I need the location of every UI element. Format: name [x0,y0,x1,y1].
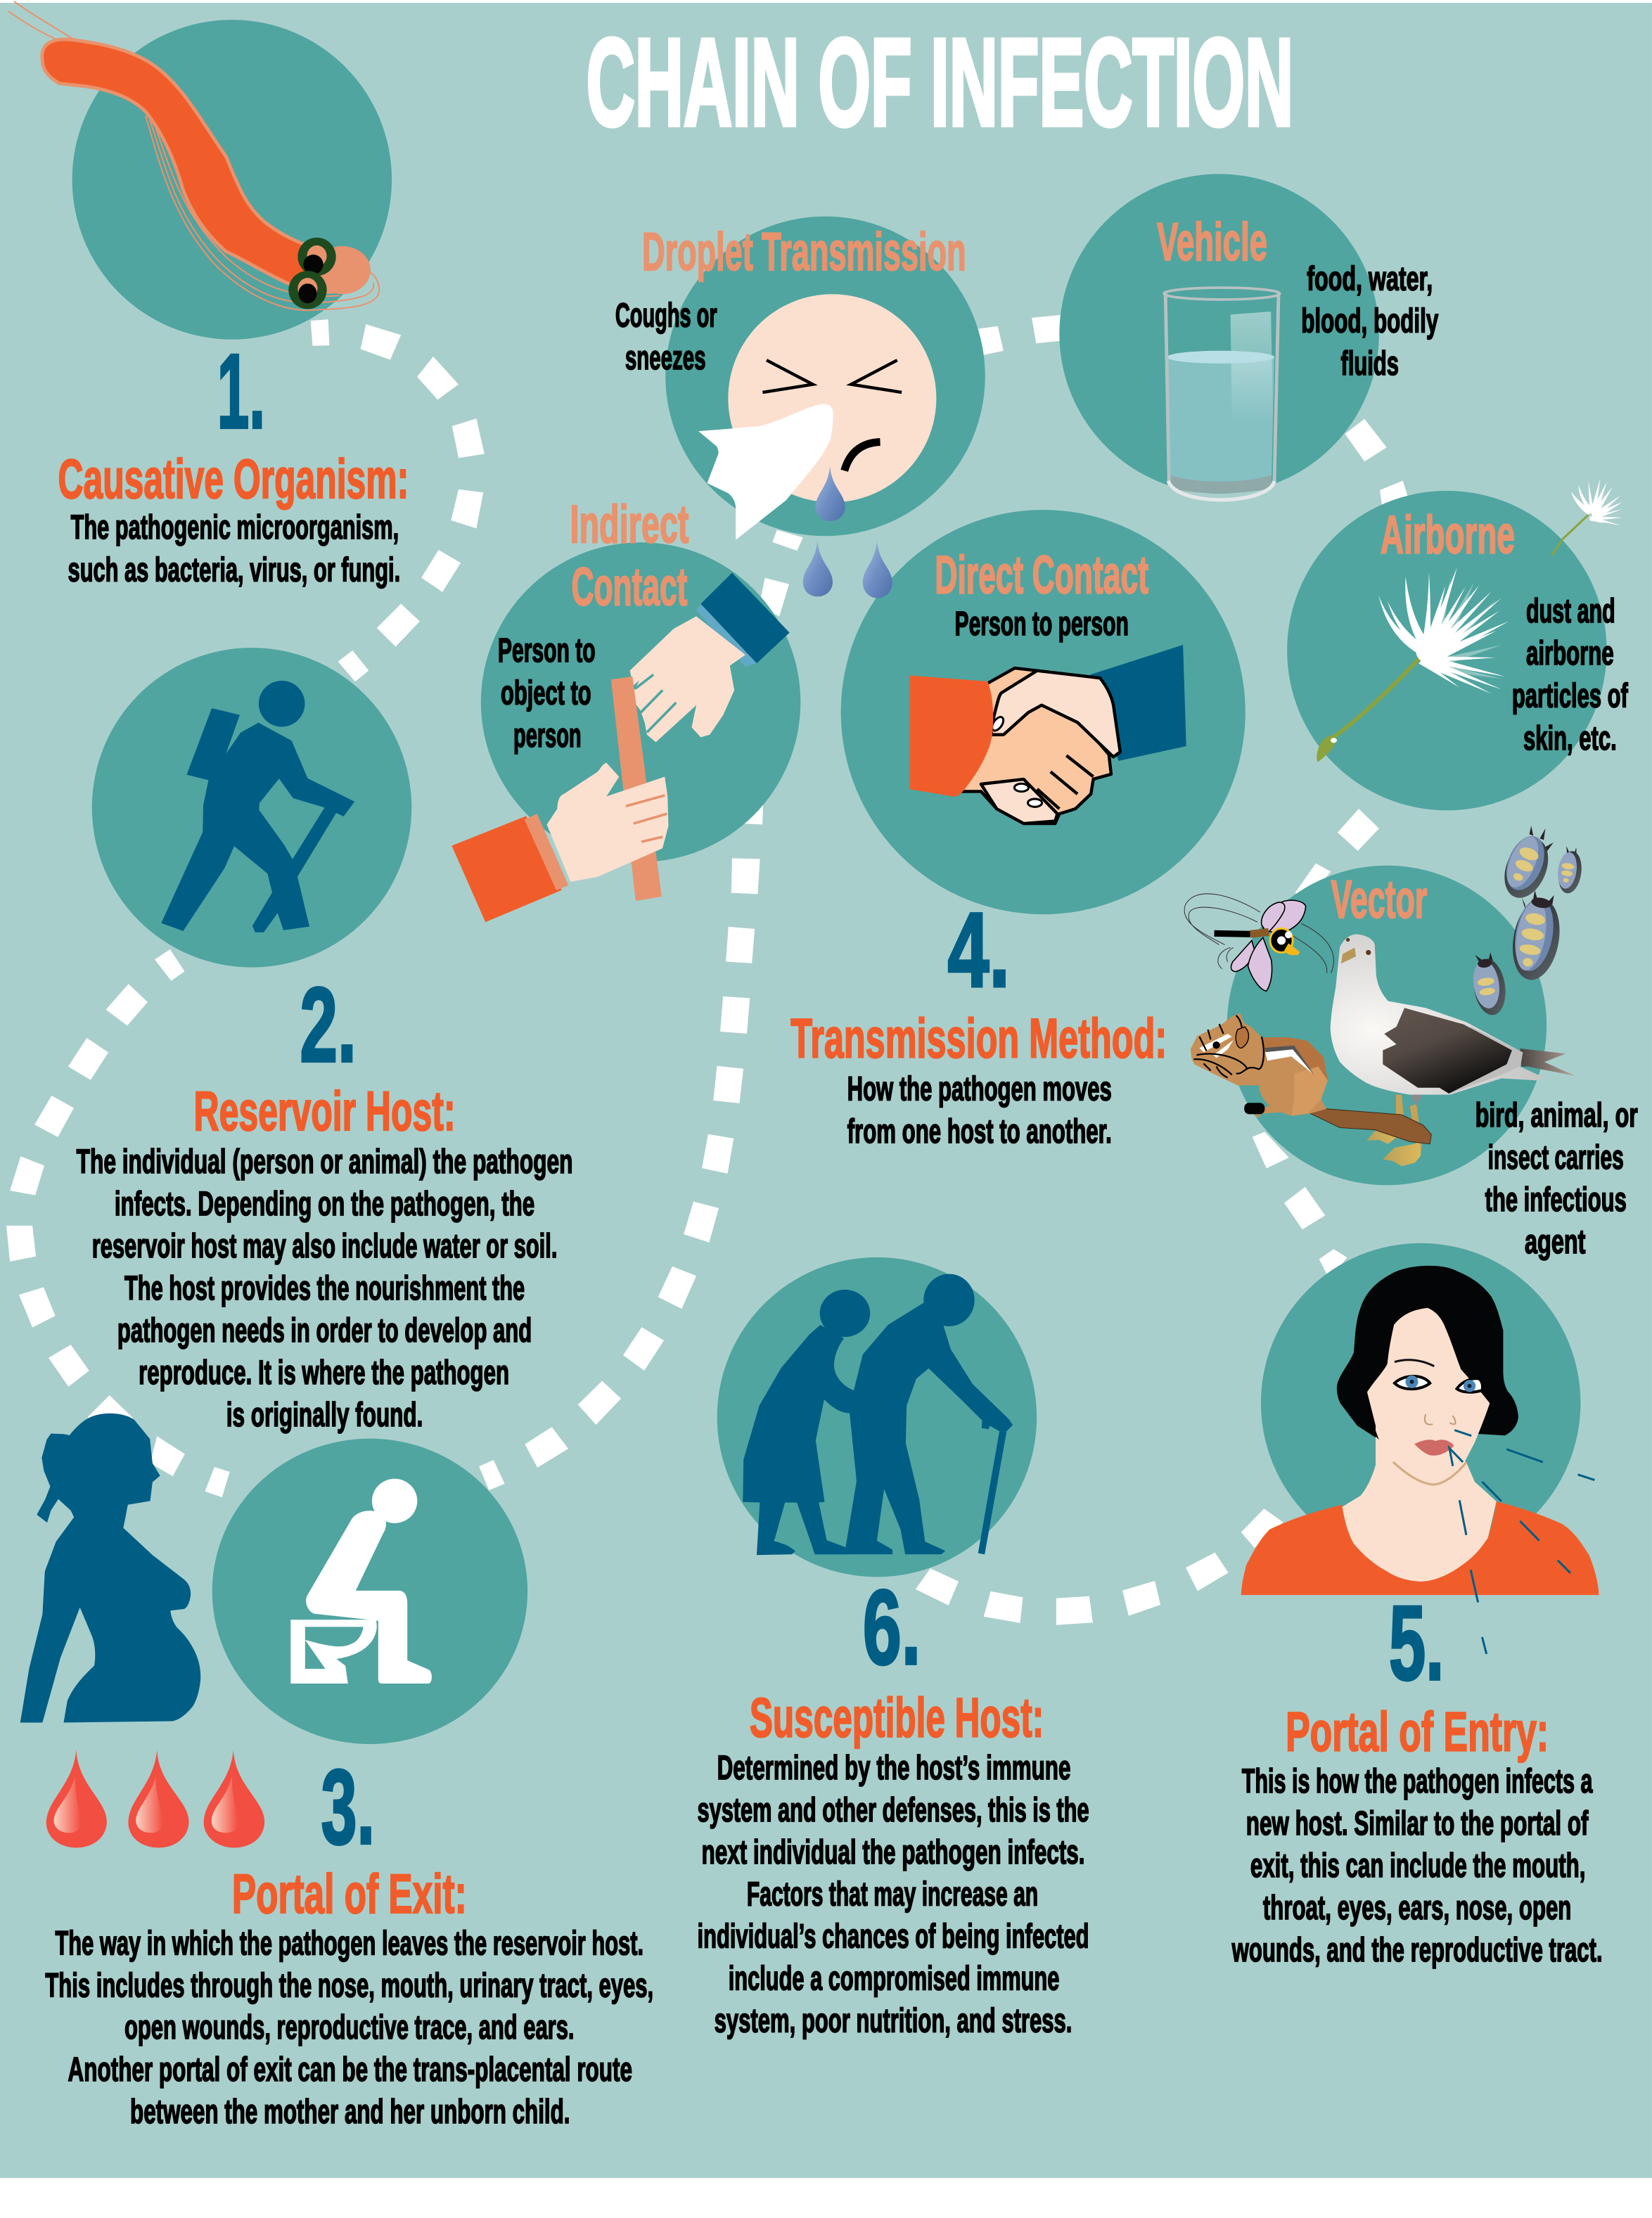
text: susceptible host description: include a compromised immune [729,1960,1059,1998]
text: portal of exit description: open wounds, reproductive trace, and ears. [124,2008,575,2046]
icon: woman portrait [1241,1266,1599,1595]
dashed chain path [6,314,1410,1625]
text: vector examples [1475,1096,1638,1261]
text: person to object to person: Person to [498,632,596,669]
text: vehicle examples: food, water, [1307,259,1433,297]
text: vehicle examples: blood, bodily [1301,302,1438,340]
icon: small dandelion seed [1552,479,1622,556]
heading: vector: Vector [1331,870,1427,930]
number 6: 6. [863,1568,921,1686]
heading: reservoir host: Reservoir Host: [194,1080,456,1142]
text: reservoir host description: reservoir host may also include water or soil. [92,1227,557,1265]
heading: vehicle: Vehicle [1157,212,1267,272]
icon: elderly couple [743,1274,1013,1555]
text: person to object to person [498,632,596,755]
text: vehicle examples [1301,259,1438,383]
icon: seagull [1331,934,1575,1166]
text: portal of exit description: Another portal of exit can be the trans-placental route [68,2051,632,2089]
text: person to object to person: person [513,717,582,755]
text: portal of exit description: between the mother and her unborn child. [130,2093,570,2131]
text: reservoir host description [77,1143,573,1434]
icon: pregnant woman [20,1414,200,1723]
text: causative organism description: The pathogenic microorganism, [71,508,399,546]
text: susceptible host description: system and other defenses, this is the [697,1791,1089,1829]
text: portal of exit description: The way in which the pathogen leaves the reservoir host. [55,1924,643,1962]
text: coughs or sneezes: sneezes [625,339,706,377]
heading: indirect contact: Contact [572,558,687,617]
number 4: 4. [947,890,1010,1009]
heading: portal of exit: Portal of Exit: [232,1863,467,1925]
number 5: 5. [1389,1583,1444,1702]
heading: direct contact: Direct Contact [935,546,1148,605]
text: reservoir host description: The host provides the nourishment the [124,1269,525,1307]
icon: sneezing face [698,294,936,540]
text: coughs or sneezes [615,297,717,377]
text: transmission method description: How the pathogen moves [847,1070,1112,1108]
heading: airborne: Airborne [1381,505,1515,565]
icon: large dandelion seed [1317,567,1509,762]
icon: glass of water [1164,288,1280,500]
icon: person on toilet [290,1479,432,1684]
text: reservoir host description: The individual (person or animal) the pathogen [77,1143,573,1181]
text: transmission method description: from one host to another. [847,1113,1112,1150]
icon: water droplets [803,466,892,598]
text: susceptible host description: individual’s chances of being infected [697,1918,1089,1956]
text: airborne examples [1512,592,1628,757]
text: person to object to person: object to [501,674,591,712]
text: portal of exit description: This includes through the nose, mouth, urinary tract, eyes, [45,1966,653,2004]
heading: susceptible host: Susceptible Host: [750,1687,1044,1749]
heading: droplet transmission: Droplet Transmission [642,222,966,282]
text: reservoir host description: is originally found. [226,1396,423,1434]
icon: blood drops [46,1750,264,1847]
text: portal of exit description [45,1924,653,2131]
icon: entry arrows [1449,1430,1594,1654]
text: vehicle examples: fluids [1341,345,1399,383]
icon: hiker [161,681,354,932]
heading: causative organism: Causative Organism: [58,448,409,510]
text: susceptible host description: system, poor nutrition, and stress. [715,2002,1072,2040]
heading: transmission method: Transmission Method: [790,1007,1167,1069]
text: transmission method description [847,1070,1112,1150]
text: causative organism description: such as bacteria, virus, or fungi. [68,551,400,589]
text: reservoir host description: reproduce. It is where the pathogen [139,1354,509,1392]
icon: lice [1469,820,1584,1017]
heading: indirect contact: Indirect [570,494,689,554]
text: susceptible host description: Determined by the host’s immune [717,1749,1070,1787]
text: portal of entry description [1231,1762,1603,1969]
number 1: 1. [217,331,265,450]
heading: indirect contact [570,494,689,617]
icon: chipmunk [1191,1013,1431,1144]
text: susceptible host description: Factors that may increase an [747,1876,1038,1913]
text: susceptible host description: next individual the pathogen infects. [702,1833,1085,1871]
number 3: 3. [321,1747,375,1866]
icon: mosquito [1184,894,1333,991]
text: causative organism description [68,508,400,589]
text: susceptible host description [697,1749,1089,2040]
text: person to person: Person to person [955,605,1129,643]
icon: bacterium [8,1,379,310]
text: reservoir host description: pathogen needs in order to develop and [117,1312,532,1350]
number 2: 2. [300,965,357,1084]
icon: handshake [910,645,1186,823]
text: coughs or sneezes: Coughs or [615,297,717,335]
text: vector examples: agent [1525,1223,1585,1261]
teal circles [72,20,1607,1744]
dash over vector circle [1253,1132,1289,1168]
icon: hands passing object [452,572,790,922]
text: reservoir host description: infects. Depending on the pathogen, the [115,1185,534,1223]
